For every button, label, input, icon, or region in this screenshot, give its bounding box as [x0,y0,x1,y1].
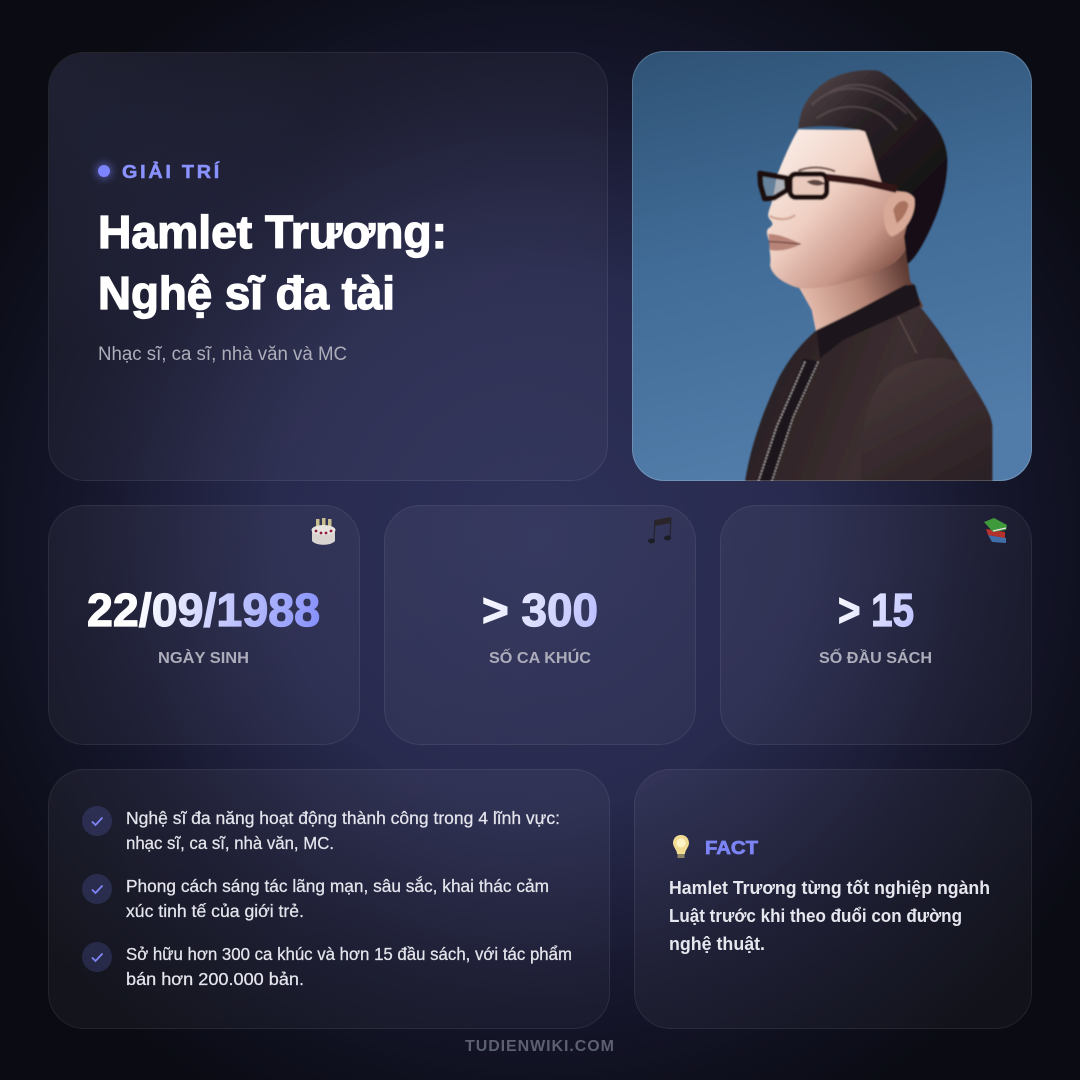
hair sheen [812,85,917,130]
key point 1: Nghệ sĩ đa năng hoạt động thành công trong 4 lĩnh vực: [126,808,560,828]
label: NGÀY SINH [158,648,249,667]
title: Hamlet Trương: [98,206,447,258]
jacket [745,283,992,482]
value: > 15 [838,584,914,636]
icon: music notes [648,517,671,544]
eye [807,180,825,186]
panel: fact [634,770,1032,1028]
value: > 300 [482,584,598,636]
key point 3: bán hơn 200.000 bản. [126,969,304,989]
face [767,129,913,288]
panel: key points [48,770,610,1028]
portrait photo [632,51,1032,482]
panel: hero heading [48,52,608,480]
title: Nghệ sĩ đa tài [98,267,395,319]
fact text: nghệ thuật. [669,934,765,954]
shirt [758,358,820,482]
label: SỐ ĐẦU SÁCH [819,647,932,667]
fact text: Luật trước khi theo đuổi con đường [669,906,962,926]
seam [898,317,917,353]
icon: books [984,518,1007,543]
category tag: GIẢI TRÍ [122,161,222,182]
stat card: birth date [48,506,360,744]
collar [817,285,921,358]
shoulder panel [882,358,992,447]
subtitle: Nhạc sĩ, ca sĩ, nhà văn và MC [98,344,347,365]
stat card: songs [384,506,696,744]
key point 2 [82,874,549,921]
fact label: FACT [705,838,758,858]
fact text [669,878,990,954]
ear [884,192,915,237]
key point 3: Sở hữu hơn 300 ca khúc và hơn 15 đầu sách, với tác phẩm [126,944,572,964]
stat card: books [720,506,1032,744]
footer credit: TUDIENWIKI.COM [465,1038,614,1055]
nose [770,215,795,219]
key point 2: Phong cách sáng tác lãng mạn, sâu sắc, khai thác cảm [126,875,549,896]
side hair and main hair [798,70,947,264]
mouth [768,234,801,251]
icon: light bulb [673,835,689,858]
eyebrow [798,167,835,171]
icon: birthday cake [312,518,336,545]
title [98,206,447,319]
label: SỐ CA KHÚC [489,647,591,667]
category tag [96,161,222,182]
key point 2: xúc tinh tế của giới trẻ. [126,901,304,921]
fact text: Hamlet Trương từng tốt nghiệp ngành [669,878,990,898]
key point 3 [82,942,572,989]
key point 1 [82,806,560,853]
value: 22/09/1988 [87,584,320,636]
glasses [760,173,897,199]
key point 1: nhạc sĩ, ca sĩ, nhà văn, MC. [126,833,334,853]
neck [798,250,924,332]
